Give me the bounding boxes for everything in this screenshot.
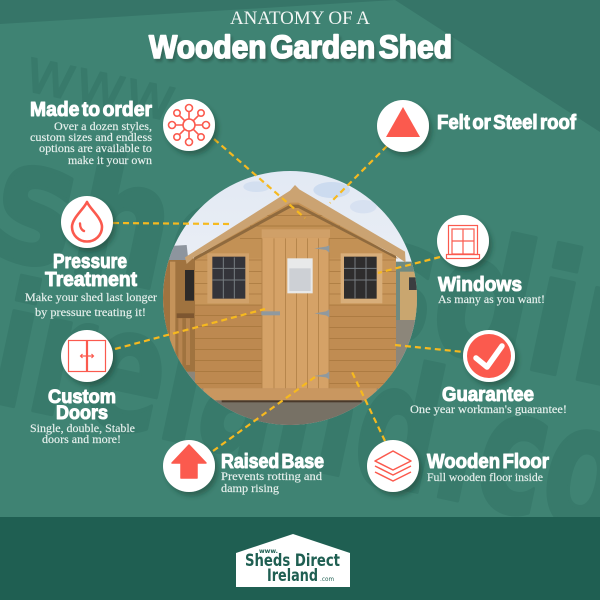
logo [236,534,350,587]
description [221,469,322,495]
panel: made to order [30,99,215,167]
panel: pressure treatment [25,196,157,319]
base [203,388,377,400]
description: options are available to [39,141,152,155]
gravel [165,320,415,425]
dashed connector lines [113,139,464,451]
wall [195,253,396,388]
description: make it your own [68,153,152,167]
description: Make your shed last longer [25,290,157,304]
heading: Pressure [53,251,127,273]
description [25,290,157,319]
wall planks [195,216,396,383]
heading: Windows [438,274,522,296]
logo: Ireland [267,566,318,586]
door [262,238,329,388]
description: doors and more! [42,432,121,446]
heading: Treatment [45,269,137,291]
title line: anatomy of a: ANATOMY OF A [230,8,370,29]
icon: window [437,215,489,267]
heading: Raised Base [221,451,324,473]
description [30,119,152,167]
heading [45,251,137,291]
shed photo circle [163,171,417,425]
description: One year workman's guarantee! [410,402,567,416]
description [30,421,135,446]
description: Over a dozen styles, [54,119,152,133]
icon: triangle roof [377,100,429,152]
background: www. [19,33,197,139]
logo: Sheds Direct [245,551,340,571]
logo: .com [320,575,334,583]
heading: Guarantee [442,384,534,406]
panel: custom doors [30,330,135,446]
icon: up arrow [163,440,215,492]
icon: network [163,99,215,151]
panel: felt or steel roof [377,100,576,152]
icon: check mark [463,330,515,382]
logo: www. [259,547,278,555]
panel: windows [437,215,545,306]
description: Single, double, Stable [30,421,135,435]
window panes [212,257,245,299]
title line: wooden garden shed: Wooden Garden Shed [149,29,452,65]
panel: guarantee [410,330,567,416]
footer band [0,517,600,600]
heading: Custom [48,387,116,408]
description: As many as you want! [438,292,545,306]
icon: water drop [61,196,113,248]
heading: Doors [56,403,108,424]
title [149,8,452,65]
neighbouring sheds [160,258,195,372]
window frames [207,253,249,303]
heading [48,387,116,424]
description: by pressure treating it! [35,305,146,319]
description: damp rising [221,481,279,495]
description: custom sizes and endless [30,130,152,144]
notice on door [287,258,313,293]
panel: raised base [163,440,324,495]
icon: double doors [61,330,113,382]
clouds [313,182,350,198]
icon: stacked layers [367,440,419,492]
heading: Felt or Steel roof [437,112,576,134]
panel: wooden floor [367,440,549,492]
description: Full wooden floor inside [427,470,543,484]
roof [194,205,396,261]
heading: Wooden Floor [427,451,549,473]
hinges [261,245,329,379]
heading: Made to order [30,99,152,121]
description: Prevents rotting and [221,469,322,483]
